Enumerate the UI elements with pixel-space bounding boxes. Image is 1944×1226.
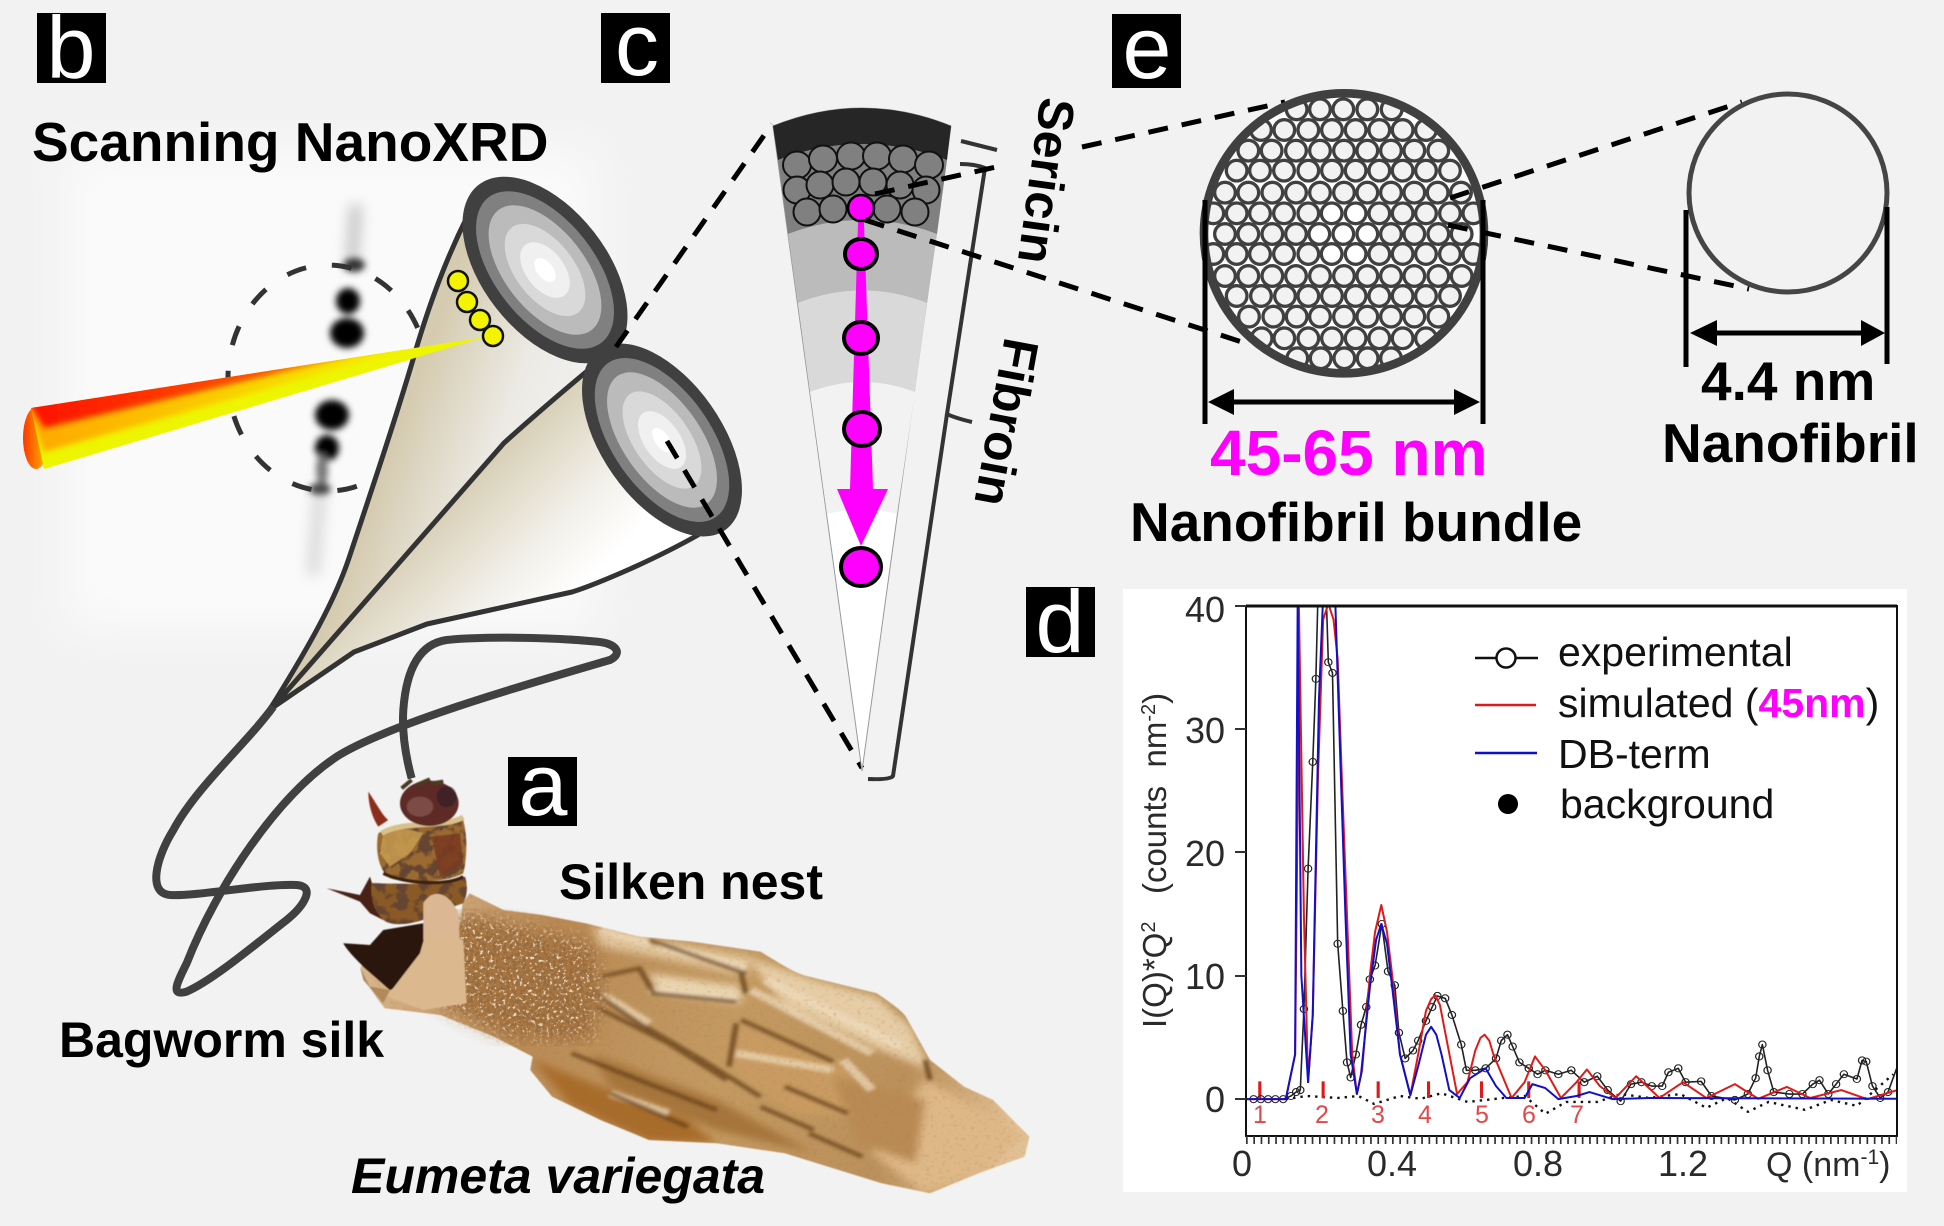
fibre cross-section: upper: [430, 147, 660, 393]
bundle dimension arrow: [1205, 200, 1483, 424]
speckled collar: [430, 915, 602, 1040]
panel label: c: [601, 0, 670, 94]
y tick labels: 40: [1185, 589, 1225, 630]
peak numbers: 6: [1522, 1101, 1536, 1129]
x tick labels: 1.2: [1658, 1143, 1708, 1184]
x-ray beam: [23, 337, 485, 469]
plot curves: [1246, 596, 1897, 1114]
panel label: d: d: [1036, 572, 1084, 671]
peak numbers: 1: [1253, 1101, 1267, 1129]
axes frame: [1235, 606, 1897, 1140]
panel e: nanofibril bundle: [1130, 93, 1919, 553]
label: Nanofibril bundle: Nanofibril bundle: [1130, 491, 1582, 553]
y tick labels: 10: [1185, 956, 1225, 997]
value: 45-65 nm: 45-65 nm: [1210, 417, 1487, 489]
background dots: [1286, 1074, 1893, 1114]
dashed zoom lines to wedge: [616, 124, 862, 768]
panel b: scanning nanoXRD diffraction and silk cones: [23, 147, 774, 709]
x tick labels: [1232, 1143, 1708, 1184]
fibre cross-section: lower: [550, 315, 774, 565]
y tick labels: 30: [1185, 710, 1225, 751]
y tick labels: [1185, 589, 1225, 1120]
title: Scanning NanoXRD: Scanning NanoXRD: [32, 111, 548, 173]
y axis title: -2: [1138, 704, 1160, 722]
nanofibril dimension arrow: [1686, 207, 1887, 367]
bark plates and creases: [571, 930, 930, 1157]
peak numbers: 3: [1371, 1101, 1385, 1129]
DB-term curve: [1246, 596, 1897, 1099]
measurement spots: [841, 195, 881, 586]
fibril bundles: [783, 142, 943, 226]
legend: background: [1560, 781, 1774, 827]
silk thread: [156, 638, 617, 993]
peak numbers: [1253, 1101, 1584, 1129]
legend: simulated (45nm): [1558, 680, 1879, 726]
label: Fibroin: Fibroin: [963, 334, 1049, 511]
legend: [1475, 629, 1879, 827]
label: Nanofibril: Nanofibril: [1662, 412, 1919, 474]
single nanofibril: [1689, 94, 1887, 292]
y tick labels: 20: [1185, 833, 1225, 874]
x axis title: Q (nm: [1766, 1146, 1860, 1184]
experimental curve: [1246, 596, 1897, 1101]
diffraction pattern: [65, 150, 595, 630]
panel a: silken nest photo: [327, 779, 1032, 1193]
magenta gradient arrow: [837, 222, 888, 546]
legend: DB-term: [1558, 731, 1711, 777]
y axis title: 2: [1138, 922, 1160, 933]
wedge layers: [773, 108, 951, 771]
plot background: [1123, 589, 1907, 1192]
bundle cross section: [1203, 93, 1484, 373]
peak numbers: 7: [1570, 1101, 1584, 1129]
x tick labels: 0.4: [1367, 1143, 1417, 1184]
cone: upper fibre: [270, 215, 612, 709]
panel c: fibre wedge: [773, 108, 951, 771]
panel label: b: b: [47, 0, 95, 97]
peak numbers: 4: [1418, 1101, 1432, 1129]
value: 4.4 nm: 4.4 nm: [1701, 350, 1875, 412]
x tick labels: 0: [1232, 1143, 1252, 1184]
cone: lower fibre: [272, 367, 698, 708]
panel d: SAXS chart: [1123, 589, 1907, 1192]
soft tonal areas: [533, 927, 1027, 1193]
dashed lines to nanofibril: [1448, 102, 1749, 289]
panel label: e: e: [1123, 0, 1171, 97]
label: Eumeta variegata: Eumeta variegata: [351, 1148, 765, 1204]
x tick labels: 0.8: [1513, 1143, 1563, 1184]
x axis title: ): [1879, 1146, 1890, 1184]
dashed zoom lines to bundle: [865, 102, 1285, 343]
bagworm: [327, 779, 467, 1010]
y axis title: (counts nm: [1136, 722, 1173, 922]
scan spots: [448, 271, 503, 346]
red ticks: [1260, 1081, 1579, 1098]
panel label: a: a: [519, 735, 568, 834]
label: Sericin: Sericin: [1007, 94, 1086, 267]
y axis title: I(Q)*Q: [1136, 933, 1173, 1028]
simulated curve: [1246, 596, 1897, 1099]
label: Silken nest: Silken nest: [559, 854, 823, 910]
nest: [358, 893, 1032, 1193]
y tick labels: 0: [1205, 1079, 1225, 1120]
x axis title: -1: [1860, 1146, 1879, 1169]
y axis title: ): [1136, 693, 1173, 704]
peak numbers: 5: [1475, 1101, 1489, 1129]
brackets: [868, 141, 997, 779]
legend: experimental: [1558, 629, 1793, 675]
dashed circle: [228, 265, 428, 491]
label: Bagworm silk: Bagworm silk: [59, 1012, 384, 1068]
peak numbers: 2: [1315, 1101, 1329, 1129]
